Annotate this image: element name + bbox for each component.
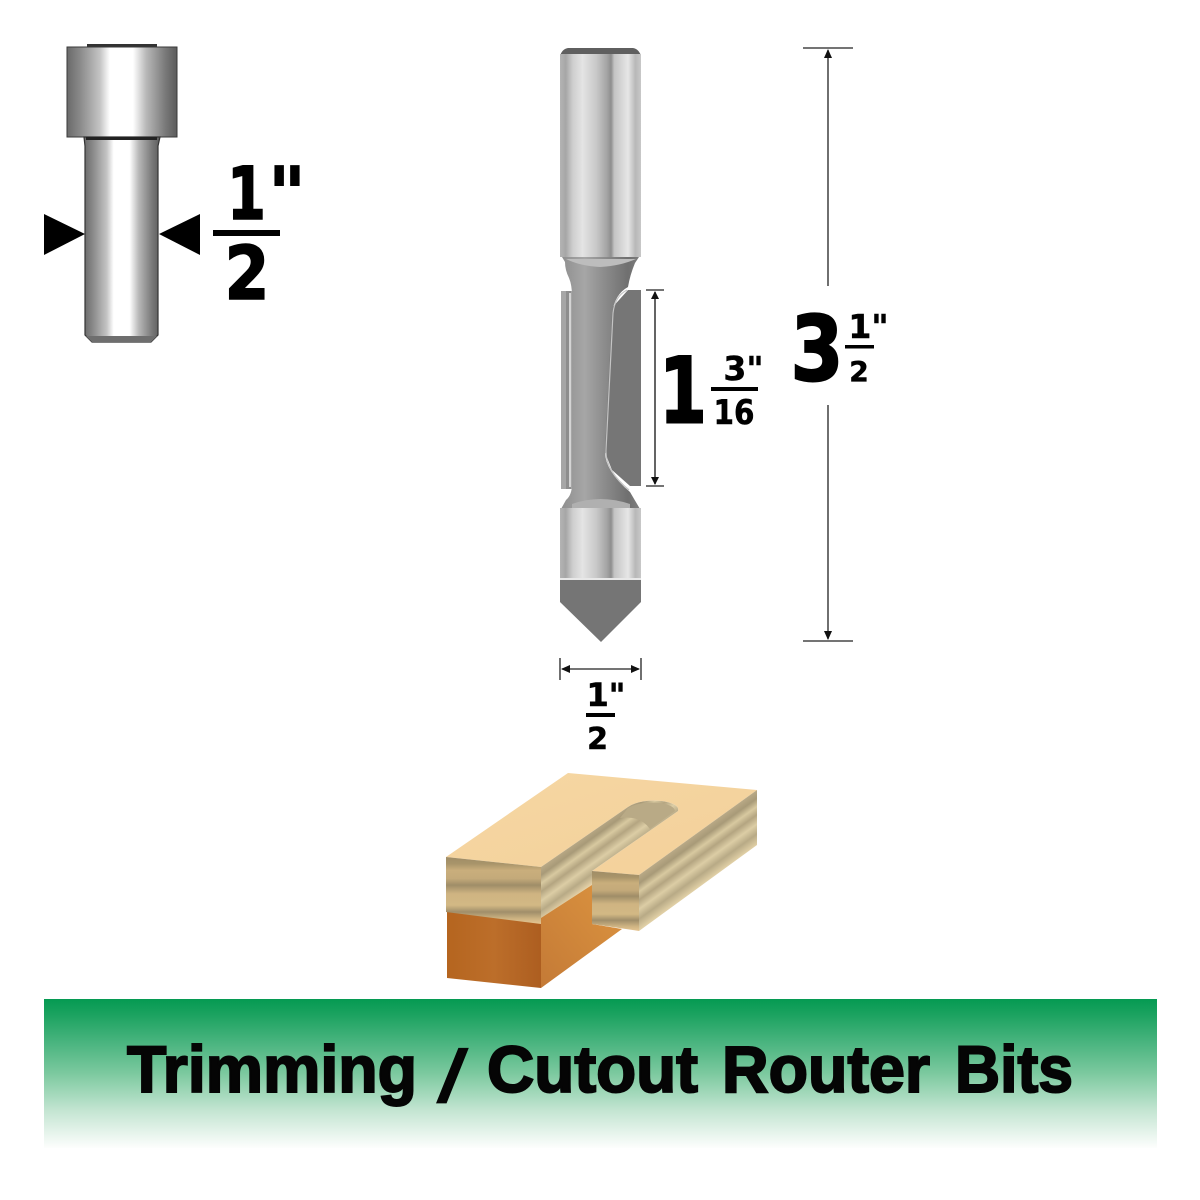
router bit [560, 48, 641, 642]
label: shank size one half inch: 1 [227, 152, 266, 237]
plywood strip front [592, 871, 639, 931]
dimension: cutting diameter [560, 658, 641, 757]
dimension line [646, 290, 664, 486]
neck and flute body [561, 257, 640, 509]
banner background [44, 999, 1157, 1148]
dimension: cutting length [646, 290, 764, 486]
hardwood side face [541, 885, 622, 988]
dimension line [803, 48, 853, 641]
arrow: left pointer [44, 214, 85, 255]
label: shank size one half inch: 2 [224, 231, 270, 317]
dimension: overall length [790, 48, 889, 641]
label: three and one half: 2 [849, 355, 869, 388]
slot inner wall [541, 801, 678, 922]
label: one and three sixteenths: 3" [723, 349, 764, 388]
dimension line [560, 658, 641, 680]
icon: wood block with cut slot [446, 773, 757, 988]
flute edge highlight [606, 290, 629, 490]
banner [44, 999, 1157, 1148]
label: three and one half: 1" [848, 307, 889, 346]
label: shank size one half inch: " [268, 152, 306, 237]
icon: collet cap [67, 44, 177, 137]
right cutting flute [600, 290, 641, 486]
plywood strip side [639, 790, 757, 931]
label: three and one half [790, 297, 889, 402]
title: Cutout [487, 1032, 698, 1106]
slot shadow [620, 803, 675, 829]
label: one half inch: 1" [587, 676, 625, 714]
shank top rim [560, 48, 641, 56]
label: one half inch: 2 [587, 722, 608, 757]
carbide tip [560, 578, 641, 642]
label: one half inch [586, 676, 625, 757]
lower collar [560, 508, 641, 578]
label: one and three sixteenths [659, 340, 764, 444]
title: / [434, 1037, 471, 1117]
hardwood front face [447, 905, 541, 988]
icon: shank cylinder [84, 137, 160, 342]
arrow: right pointer [159, 214, 200, 255]
left cutting flute [561, 291, 572, 489]
title: Trimming [127, 1032, 417, 1106]
title [127, 1032, 1073, 1117]
label: shank size one half inch [213, 152, 306, 317]
upper shank [560, 54, 641, 257]
label: one and three sixteenths: 1 [659, 340, 707, 444]
top veneer face [446, 773, 757, 875]
title: Bits [955, 1032, 1073, 1106]
plywood front face [446, 857, 541, 924]
label: three and one half: 3 [790, 297, 844, 402]
title: Router [722, 1032, 930, 1106]
shank diameter diagram [44, 44, 306, 342]
neck highlights [566, 259, 636, 509]
label: one and three sixteenths: 16 [714, 393, 754, 433]
